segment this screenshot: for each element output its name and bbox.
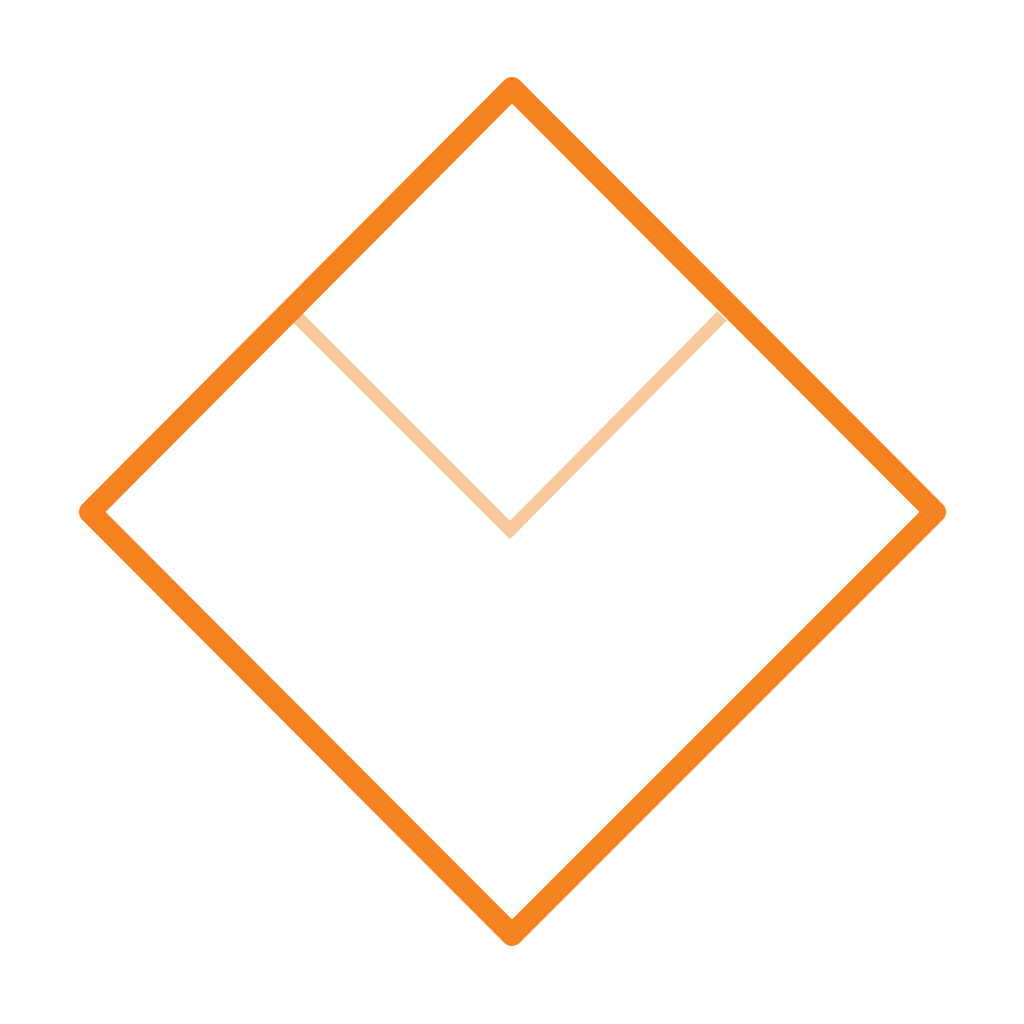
diamond outline bbox=[90, 88, 935, 935]
inner chevron line bbox=[298, 316, 722, 530]
